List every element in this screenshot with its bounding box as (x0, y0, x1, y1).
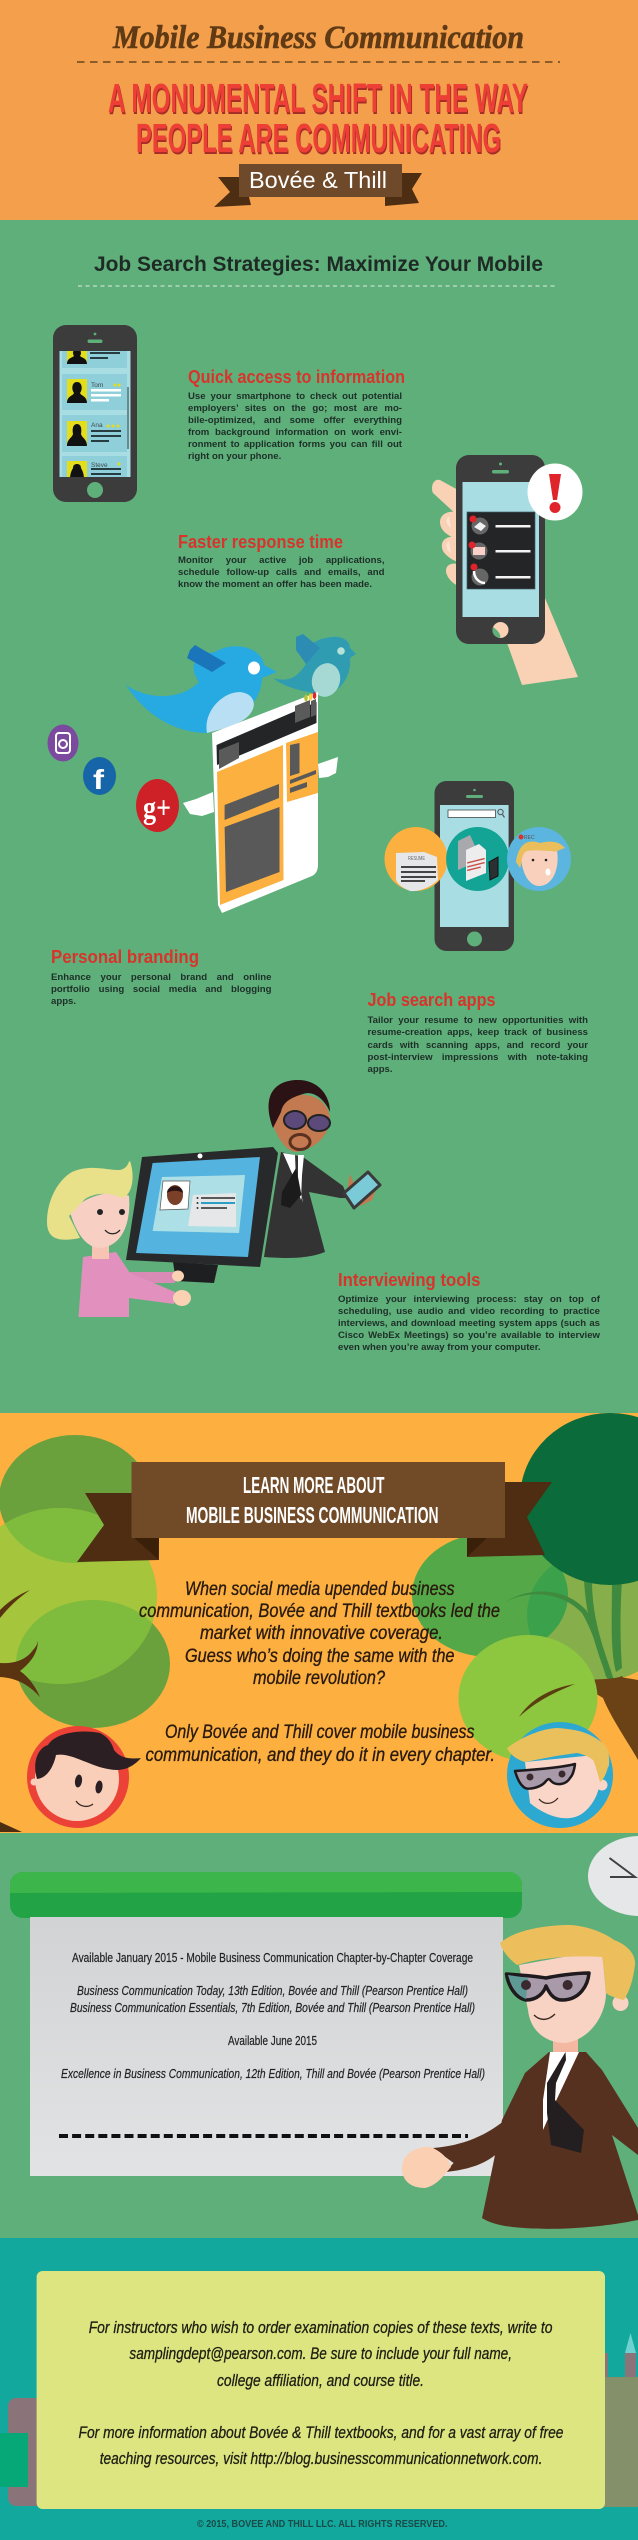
monitor (126, 1147, 278, 1283)
text block: quick access body (188, 391, 402, 462)
text block: job search apps body: resume-creation apps, keep track of business (368, 1027, 588, 1038)
text block: interviewing tools body: interviews, and download meeting system apps (such as (338, 1318, 600, 1329)
text: when social media upended: communication, and they do it in every chapter. (146, 1745, 495, 1766)
icon: clock (588, 1836, 638, 1916)
paper with availability list (30, 1917, 503, 2176)
heading: job search apps: Job search apps (368, 990, 496, 1010)
right tree (412, 1413, 638, 1761)
resume circle (384, 827, 448, 891)
icon: google plus (136, 779, 179, 832)
text block: interviewing tools body: Optimize your interviewing process: stay on top of (338, 1294, 600, 1305)
panel: header (0, 0, 638, 220)
icon: phone with contacts: Ana (91, 422, 103, 429)
resume circle: RESUME (408, 856, 425, 862)
title: Mobile Business Communication: Mobile Business Communication (112, 20, 524, 56)
text block: quick access body: ronment to application forms you can fill out (188, 439, 402, 450)
text: when social media upended: Guess who’s doing the same with the (185, 1646, 454, 1667)
text block: job search apps body: apps. (368, 1064, 393, 1075)
text: when social media upended: Only Bovée and Thill cover mobile business (165, 1722, 475, 1743)
text block: quick access body: bile-optimized, and some offer everything (188, 415, 402, 426)
text block: job search apps body: Tailor your resume to new opportunities with (368, 1015, 588, 1026)
woman with blond hair (47, 1161, 191, 1317)
text: when social media upended (139, 1579, 500, 1766)
icon: facebook: f (93, 764, 105, 795)
icon: second bird (273, 634, 356, 700)
heading: personal branding: Personal branding (51, 947, 199, 967)
ribbon: Bovée & Thill (214, 164, 422, 207)
icon: hand holding phone with alert (432, 455, 582, 685)
icon: blond face with glasses (507, 1722, 613, 1828)
text block: interviewing tools body: even when you’re away from your computer. (338, 1342, 541, 1353)
heading: faster response: Faster response time (178, 532, 343, 552)
text block: quick access body: employers’ sites on the go; most are mo- (188, 403, 402, 414)
icon: big twitter bird (126, 645, 277, 733)
info card: college affiliation, and course title. (217, 2371, 424, 2390)
scroll roller (10, 1872, 522, 1918)
paper with availability list: Excellence in Business Communication, 12th Edition, Thill and Bovée (Pearson Prentice Hall) (61, 2066, 485, 2081)
recording boy circle: REC (524, 835, 535, 841)
text block: quick access body: Use your smartphone to check out potential (188, 391, 402, 402)
paper with availability list: Available January 2015 - Mobile Business Communication Chapter-by-Chapter Coverage (72, 1950, 473, 1965)
text block: job search apps body: cards with scanning apps, and record your (368, 1040, 588, 1051)
recording boy circle (507, 827, 571, 891)
info card (37, 2271, 605, 2509)
alert bubble (528, 464, 582, 520)
text block: personal branding body: Enhance your personal brand and online (51, 972, 272, 983)
text: when social media upended: mobile revolution? (253, 1668, 385, 1689)
heading: job search strategies: Job Search Strategies: Maximize Your Mobile (94, 253, 543, 276)
documents circle (446, 827, 509, 891)
panel: instructors footer (0, 2238, 638, 2540)
interviewer in suit (264, 1080, 380, 1258)
text block: faster response body: Monitor your active job applications, (178, 555, 384, 566)
icon: phone with contacts: Tom (91, 382, 103, 389)
panel: job search strategies (47, 256, 582, 1317)
icon: phone with contacts: Steve (91, 462, 108, 469)
paper with availability list: Business Communication Today, 13th Edition, Bovée and Thill (Pearson Prentice Hall) (77, 1983, 468, 1998)
info card: samplingdept@pearson.com. Be sure to include your full name, (129, 2344, 512, 2363)
paper with availability list: Available June 2015 (228, 2033, 317, 2048)
headline: monumental shift (108, 75, 528, 161)
text block: interviewing tools body: Cisco WebEx Meetings) so you’re available to interview (338, 1330, 600, 1341)
icon: google plus: g+ (143, 789, 171, 825)
icon: phone with contacts (53, 325, 137, 502)
text block: quick access body: from background information on work envi- (188, 427, 402, 438)
text block: personal branding body: apps. (51, 996, 76, 1007)
text: when social media upended: market with innovative coverage. (200, 1623, 443, 1644)
text block: faster response body: schedule follow-up calls and emails, and (178, 567, 384, 578)
icon: facebook (83, 757, 116, 795)
text block: job search apps body: post-interview impressions with note-taking (368, 1052, 588, 1063)
text block: personal branding body: portfolio using social media and blogging (51, 984, 272, 995)
text block: interviewing tools body: scheduling, use audio and video recording to practice (338, 1306, 600, 1317)
decor left (0, 2398, 48, 2506)
illustration: presenter (402, 1925, 638, 2229)
text: when social media upended: When social media upended business (185, 1579, 455, 1600)
icon: job search phone (384, 781, 571, 951)
info card: teaching resources, visit http://blog.businesscommunicationnetwork.com. (100, 2449, 542, 2468)
left tree (0, 1435, 170, 1832)
icon: dark-haired face (27, 1726, 141, 1828)
illustration: video interview (47, 1080, 380, 1317)
copyright: © 2015, BOVEE AND THILL LLC. ALL RIGHTS RESERVED. (197, 2519, 448, 2530)
text block: quick access body: right on your phone. (188, 451, 281, 462)
text: when social media upended: communication, Bovée and Thill textbooks led the (139, 1601, 500, 1622)
text block: interviewing tools body (338, 1294, 600, 1353)
panel: availability (0, 1833, 638, 2238)
icon: winged browser window (183, 692, 338, 913)
heading: quick access: Quick access to information (188, 367, 405, 387)
ribbon: Bovée & Thill: Bovée & Thill (249, 167, 387, 193)
text block: job search apps body (368, 1015, 588, 1075)
paper with availability list: Business Communication Essentials, 7th Edition, Bovée and Thill (Pearson Prentice Hall) (70, 2000, 475, 2015)
text block: faster response body: know the moment an offer has been made. (178, 579, 372, 590)
hand (506, 598, 578, 685)
decor right (600, 2333, 638, 2507)
text block: personal branding body (51, 972, 272, 1007)
text block: faster response body (178, 555, 384, 590)
heading: interviewing tools: Interviewing tools (338, 1270, 480, 1290)
banner: learn more (77, 1462, 552, 1562)
banner: learn more: MOBILE BUSINESS COMMUNICATION (186, 1502, 438, 1528)
icon: instagram (48, 724, 78, 762)
panel: learn more (0, 1413, 638, 1833)
banner: learn more: LEARN MORE ABOUT (243, 1472, 384, 1498)
